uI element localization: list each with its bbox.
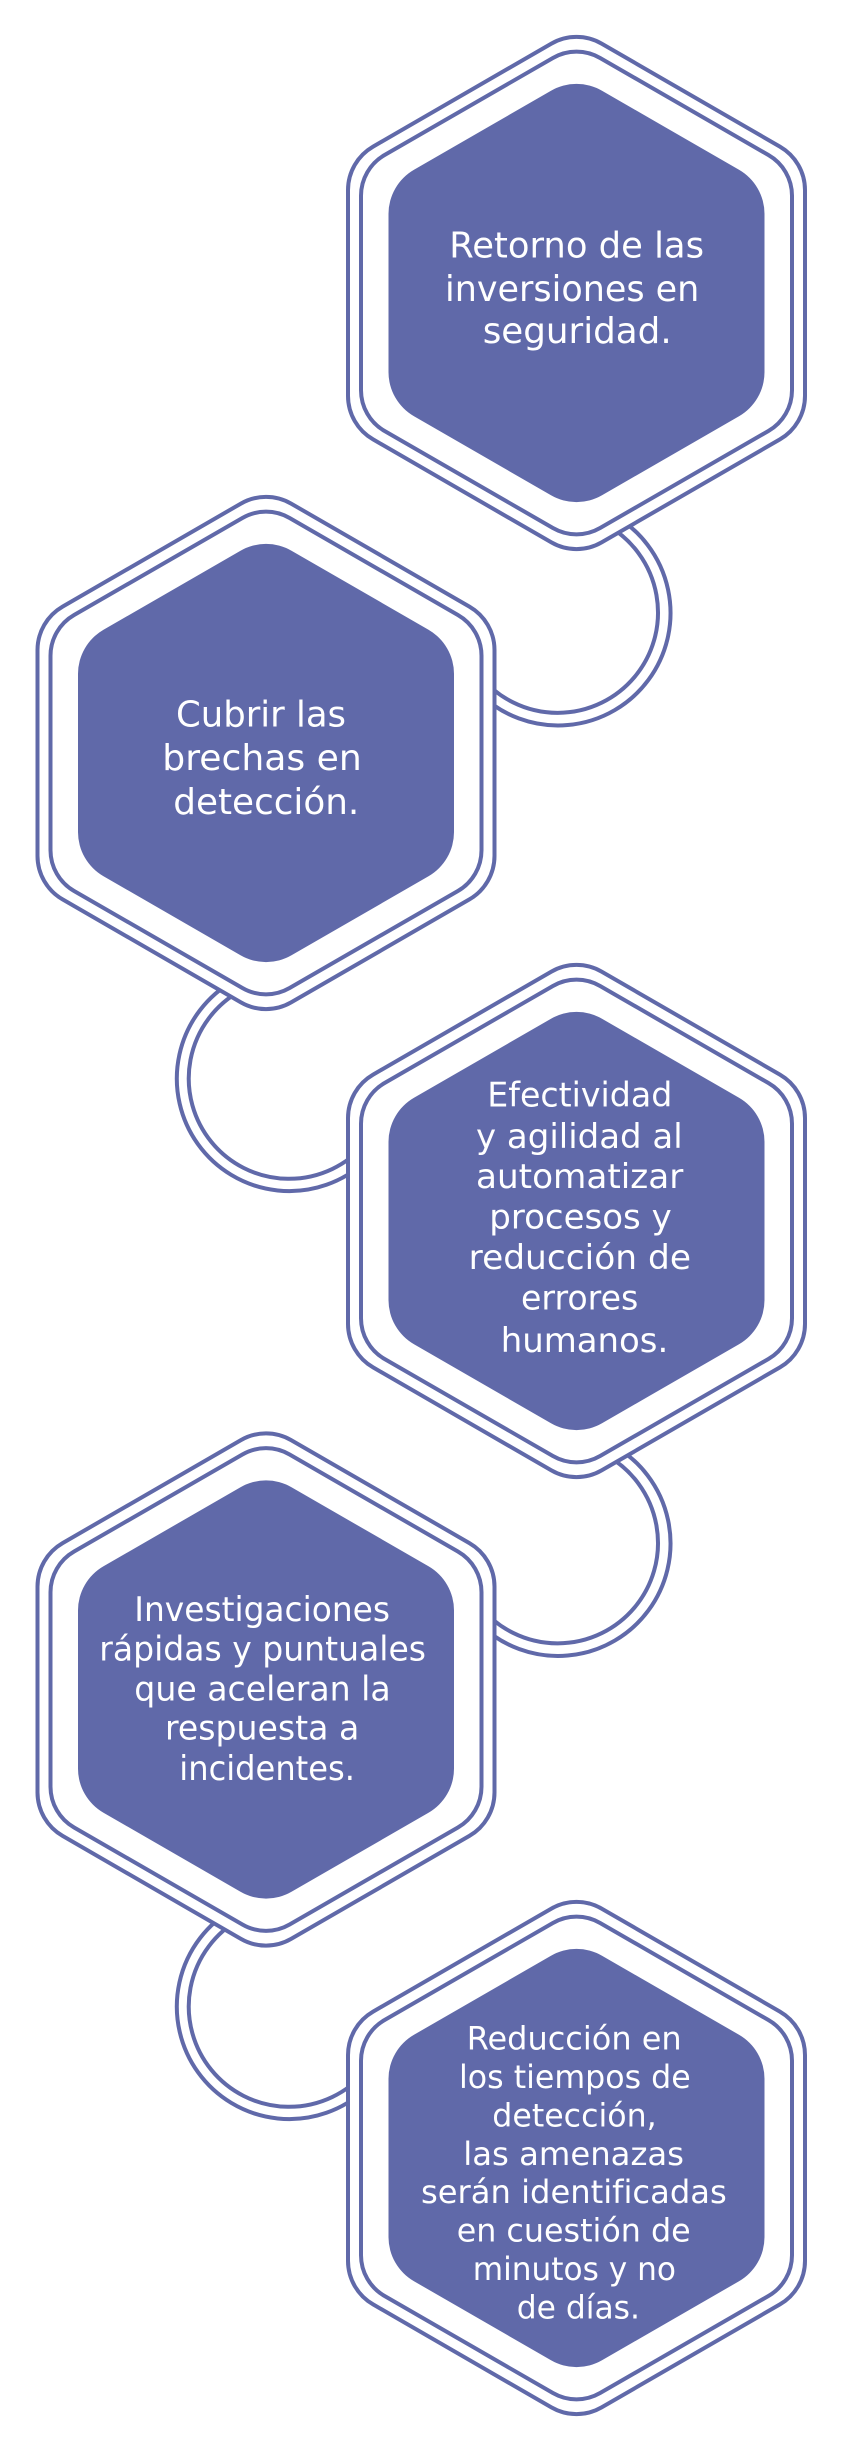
hexagon 5 text: los tiempos de [459, 2058, 691, 2096]
connector: hexagon 2 to 3 [177, 981, 365, 1191]
hexagon 2 text: Cubrir las [176, 694, 346, 735]
hexagon 5 text: detección, [492, 2096, 657, 2134]
hexagon 5 text [421, 2020, 727, 2326]
hexagon 1 text: seguridad. [483, 311, 672, 352]
hexagon 2 text [162, 694, 362, 823]
hexagon 2 text: detección. [173, 782, 359, 823]
hexagon 5 shape [348, 1902, 805, 2414]
hexagon 3 text: Efectividad [487, 1075, 672, 1115]
hexagon 1 text [445, 226, 704, 352]
hexagon 4 text: Investigaciones [134, 1590, 390, 1630]
hexagon 3 shape [348, 965, 805, 1477]
hexagon 3 text: y agilidad al [476, 1117, 683, 1157]
hexagon 5 text: serán identificadas [421, 2173, 727, 2211]
hexagon 5 text: las amenazas [463, 2135, 684, 2173]
hexagon 3 text: reducción de [469, 1238, 691, 1278]
hexagon 3: efectividad y agilidad [348, 965, 805, 1477]
hexagon 1 text: inversiones en [445, 269, 699, 310]
hexagon 4 shape [37, 1433, 494, 1946]
hexagon 4 text: que aceleran la [134, 1669, 391, 1709]
hexagon 1 text: Retorno de las [449, 226, 704, 266]
hexagon 3 text: automatizar [476, 1157, 683, 1197]
hexagon 1 shape [348, 37, 805, 549]
connector: hexagon 1 to 2 [480, 515, 671, 725]
hexagon 3 text: procesos y [489, 1198, 672, 1238]
hexagon 5 text: de días. [517, 2288, 640, 2326]
connector: hexagon 4 to 5 [177, 1909, 365, 2119]
hexagon 5 text: Reducción en [467, 2020, 682, 2058]
connector: hexagon 3 to 4 [480, 1446, 671, 1656]
hexagon 2 shape [37, 497, 494, 1009]
hexagon 3 text: errores [521, 1279, 638, 1319]
hexagon 4 text: incidentes. [179, 1749, 355, 1789]
hexagon 4 text: rápidas y puntuales [99, 1629, 426, 1669]
hexagon 5 text: en cuestión de [457, 2212, 691, 2250]
hexagon 4: investigaciones rapidas [37, 1433, 494, 1946]
hexagon 3 text [469, 1075, 691, 1361]
hexagon 4 text: respuesta a [165, 1709, 359, 1749]
hexagon 5: reduccion de tiempos [348, 1902, 805, 2414]
hexagon 4 text [99, 1590, 426, 1789]
hexagon 3 text: humanos. [501, 1321, 668, 1361]
hexagon 2 text: brechas en [162, 738, 362, 779]
hexagon 1: retorno de inversiones [348, 37, 805, 549]
hexagon 2: cubrir brechas [37, 497, 494, 1009]
hexagon 5 text: minutos y no [473, 2250, 676, 2288]
